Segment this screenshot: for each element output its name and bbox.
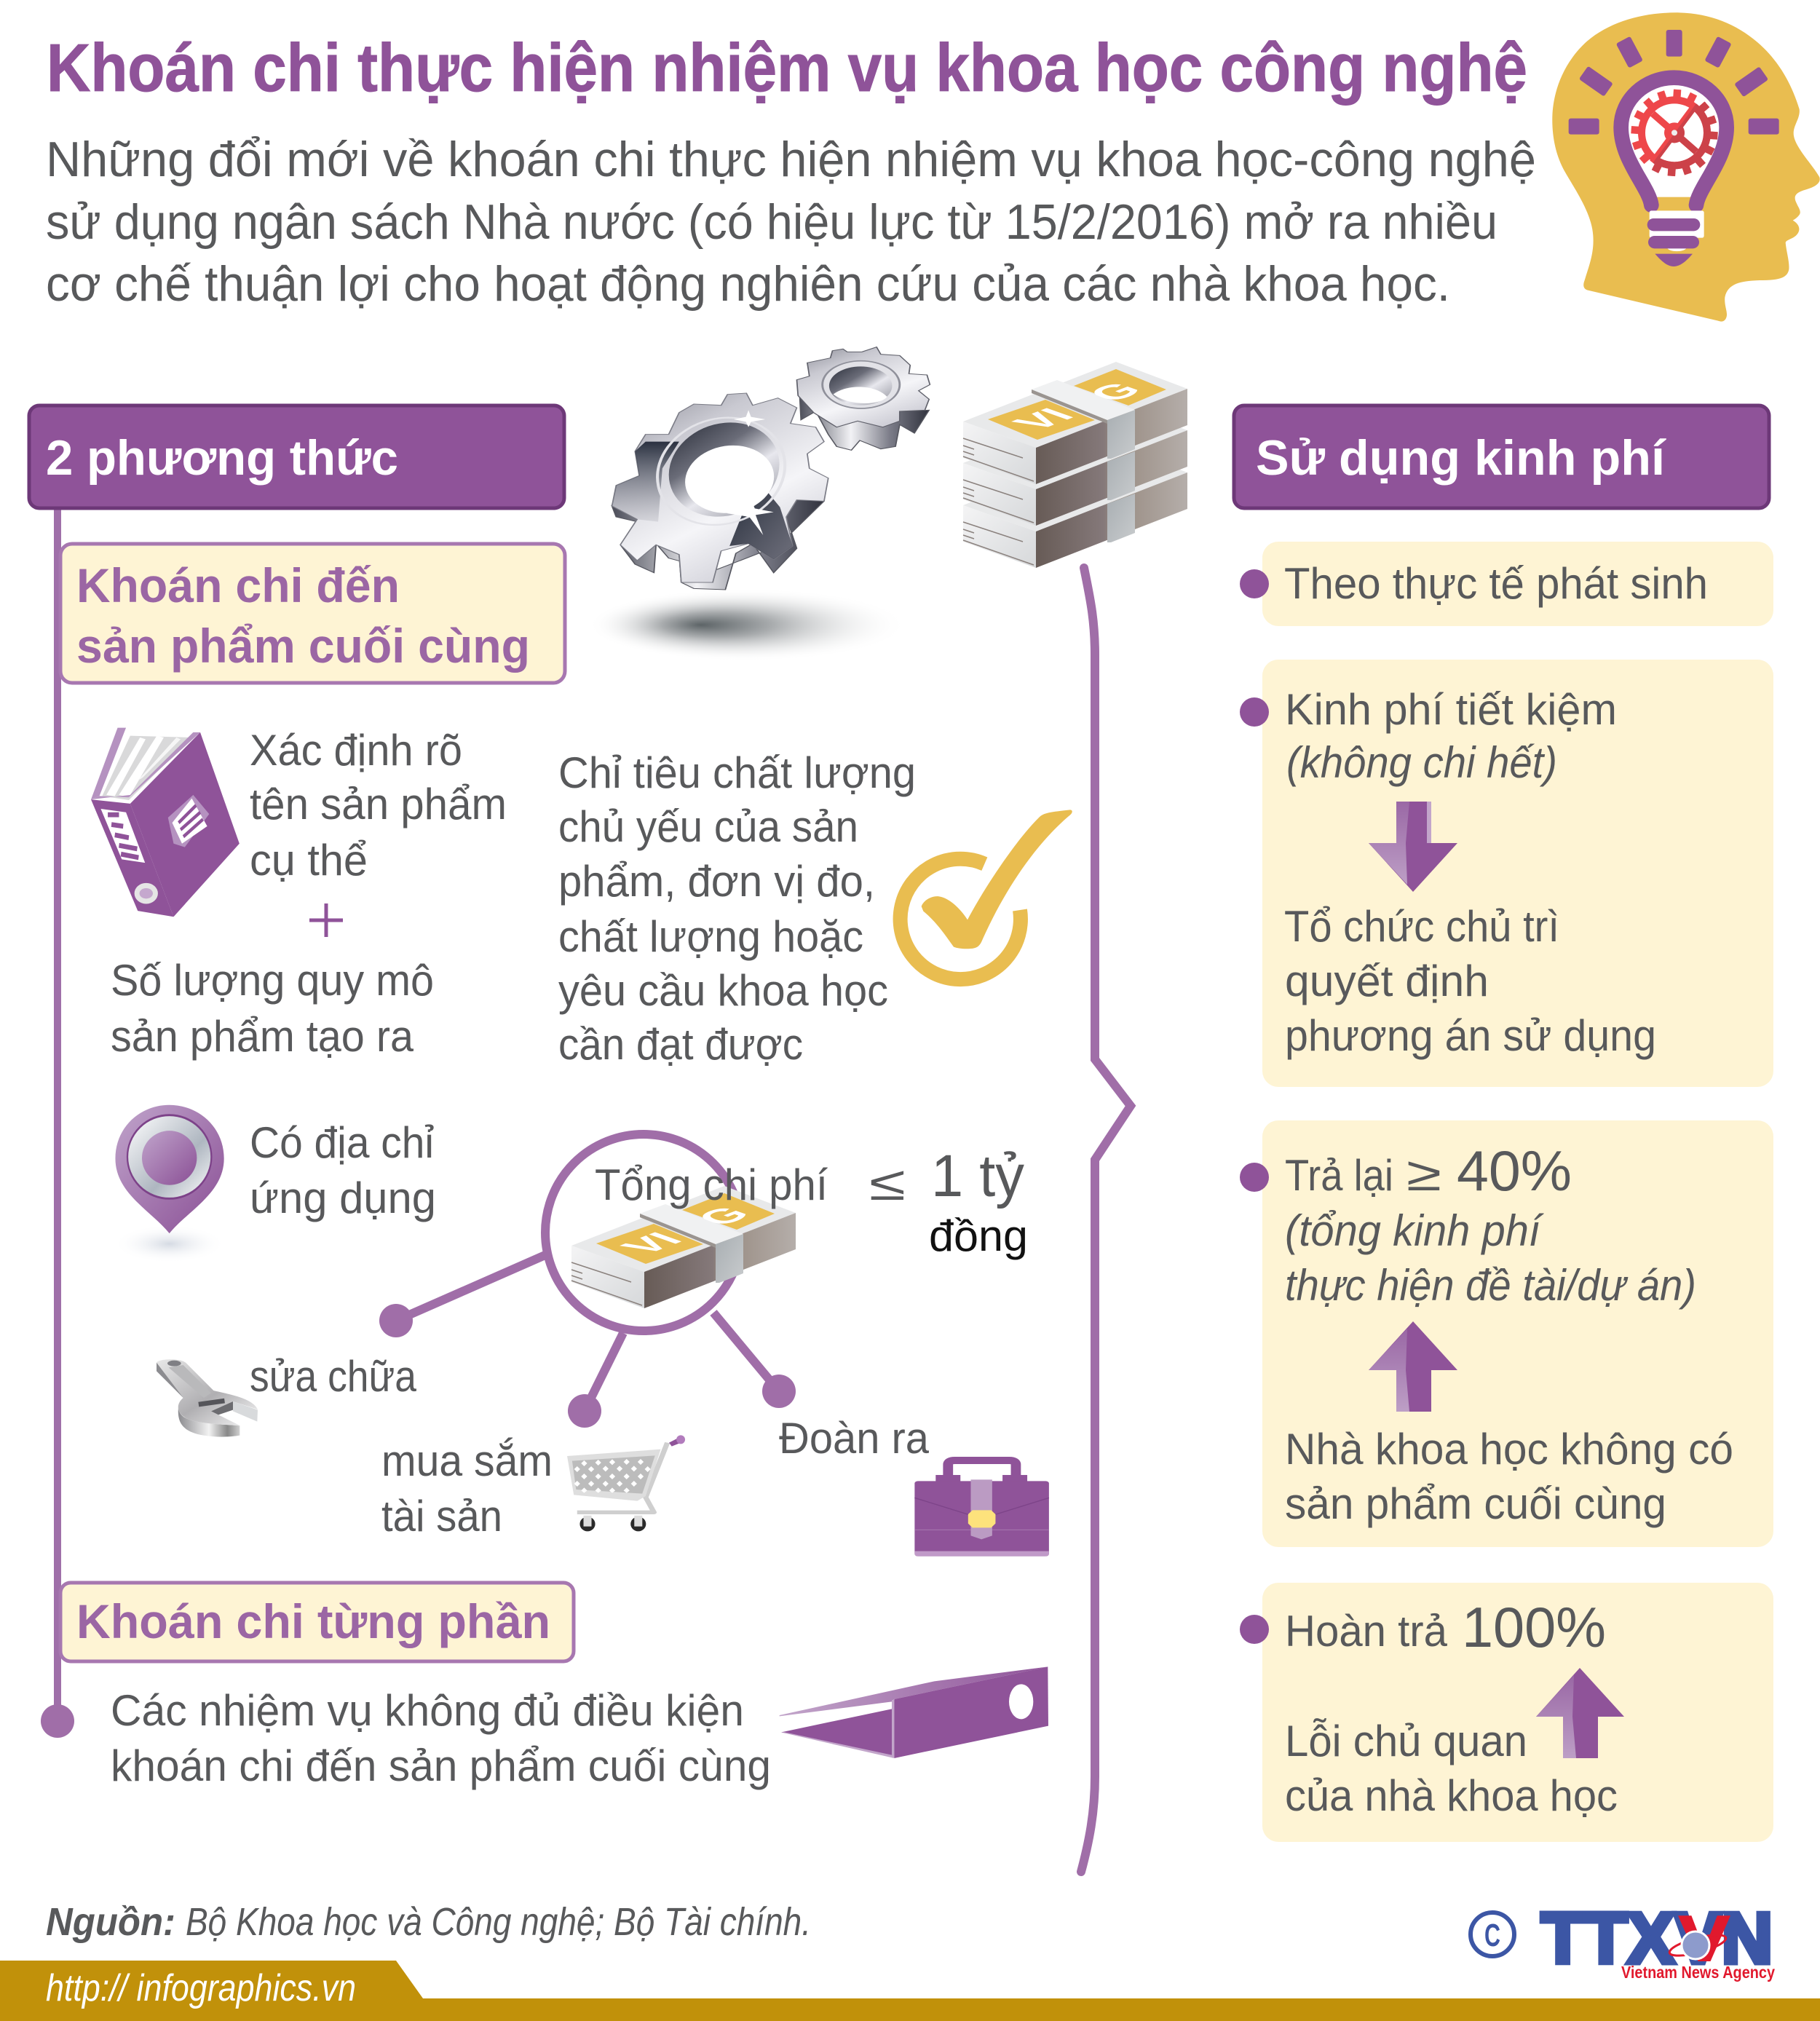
text: co dia chi ung dung: ứng dụng [250,1174,436,1222]
text: cac nhiem vu khong du dieu kien [111,1686,771,1790]
card: theo thuc te phat sinh [1240,542,1773,626]
text: chi tieu chat luong: phẩm, đơn vị đo, [558,857,875,906]
icon: purple binder [91,728,240,917]
card: kinh phi tiet kiem: phương án sử dụng [1285,1011,1656,1060]
card: tra lai 40%: Trả lại [1285,1151,1393,1200]
subheading box: khoan chi tung phan: Khoán chi từng phần [76,1594,550,1648]
text: mua sam tai san [381,1436,553,1541]
card: tra lai 40%: Nhà khoa học không có [1285,1425,1733,1474]
text: so luong quy mo san pham tao ra: Số lượng quy mô [111,956,434,1005]
arrow down [1369,802,1457,892]
text: co dia chi ung dung: Có địa chỉ [250,1118,434,1167]
icon: head with lightbulb and gear [1552,12,1820,322]
logo: TTXVN: V [1679,1902,1730,1974]
intro text [46,132,1536,312]
connector lines and dots [379,1254,796,1428]
vertical timeline with end dot [41,502,74,1738]
card: hoan tra 100%: Lỗi chủ quan [1285,1717,1527,1765]
arrow up [1536,1668,1624,1758]
icon: location pin [114,1105,226,1263]
logo: TTXVN: TTXVN [1541,1898,1773,1978]
header: 2 phuong thuc: 2 phương thức [46,430,398,486]
logo: TTXVN: C [1484,1918,1500,1953]
card: tra lai 40%: sản phẩm cuối cùng [1285,1479,1666,1528]
icon: briefcase [914,1460,1049,1557]
text: so luong quy mo san pham tao ra [111,956,434,1061]
card: kinh phi tiet kiem: Kinh phí tiết kiệm [1285,685,1617,734]
header: 2 phuong thuc [29,406,564,508]
subheading box: khoan chi den san pham cuoi cung: Khoán chi đến [76,558,400,612]
text: cac nhiem vu khong du dieu kien: Các nhiệm vụ không đủ điều kiện [111,1686,744,1735]
icon: gold check mark [901,810,1072,979]
text: chi tieu chat luong [558,748,916,1069]
subheading box: khoan chi den san pham cuoi cung: sản phẩm cuối cùng [76,619,530,673]
text: chi tieu chat luong: chủ yếu của sản [558,802,858,851]
text: mua sam tai san: mua sắm [381,1436,553,1485]
footer band with url [0,1961,1820,2021]
source: Bộ Khoa học và Công nghệ; Bộ Tài chính. [186,1900,811,1944]
text: so luong quy mo san pham tao ra: sản phẩm tạo ra [111,1012,414,1061]
icon: shopping cart [567,1435,685,1531]
icon: open folder [780,1666,1048,1758]
header: su dung kinh phi [1234,406,1769,508]
intro text: Những đổi mới về khoán chi thực hiện nhiệm vụ khoa học-công nghệ [46,132,1536,187]
subheading box: khoan chi tung phan [60,1583,574,1661]
text: sua chua: sửa chữa [250,1352,417,1401]
arrow up [1369,1321,1457,1412]
plus sign [309,903,343,937]
magnifier circle [545,1134,742,1331]
intro text: cơ chế thuận lợi cho hoạt động nghiên cứu của các nhà khoa học. [46,256,1450,312]
footer band with url: http:// infographics.vn [46,1967,356,2009]
header: su dung kinh phi: Sử dụng kinh phí [1256,430,1666,486]
text: less than or equal 1 ty dong: ≤ [869,1156,906,1210]
text: mua sam tai san: tài sản [381,1492,502,1541]
icon: wrench [157,1359,258,1437]
text: co dia chi ung dung [250,1118,436,1222]
text: xac dinh ro ten san pham cu the: tên sản phẩm [250,780,507,828]
text: xac dinh ro ten san pham cu the [250,726,507,885]
card: kinh phi tiet kiem: Tổ chức chủ trì [1284,902,1559,951]
card: kinh phi tiet kiem: (không chi hết) [1286,738,1557,787]
card: hoan tra 100%: Hoàn trả [1285,1607,1448,1656]
text: less than or equal 1 ty dong: đồng [929,1211,1028,1260]
source: Nguồn: [46,1900,175,1944]
intro text: sử dụng ngân sách Nhà nước (có hiệu lực từ 15/2/2016) mở ra nhiều [46,194,1497,250]
panel: 2 phuong thuc [29,406,1072,1790]
text: xac dinh ro ten san pham cu the: cụ thể [250,836,368,885]
card: tra lai 40%: 40% [1457,1139,1572,1203]
text: xac dinh ro ten san pham cu the: Xác định rõ [250,726,462,775]
text: chi tieu chat luong: cần đạt được [558,1020,803,1069]
card: tra lai 40%: (tổng kinh phí [1285,1206,1544,1255]
text: doan ra: Đoàn ra [779,1414,930,1463]
card: hoan tra 100%: của nhà khoa học [1285,1771,1618,1820]
text: chi tieu chat luong: chất lượng hoặc [558,912,863,961]
icon: single money bundle [571,1186,796,1308]
bracket connector [1081,568,1131,1872]
text: less than or equal 1 ty dong: 1 tỷ [931,1143,1024,1209]
subheading box: khoan chi den san pham cuoi cung [60,544,565,683]
card: tra lai 40%: ≥ [1406,1147,1441,1201]
text: chi tieu chat luong: Chỉ tiêu chất lượng [558,748,916,797]
logo: TTXVN: Vietnam News Agency [1621,1963,1775,1982]
card: hoan tra 100%: 100% [1462,1595,1606,1659]
card: hoan tra 100% [1240,1583,1773,1842]
text: less than or equal 1 ty dong [869,1143,1028,1260]
card: kinh phi tiet kiem [1240,660,1773,1087]
title: Khoán chi thực hiện nhiệm vụ khoa học công nghệ [47,30,1527,106]
card: tra lai 40% [1240,1120,1773,1547]
card: kinh phi tiet kiem: quyết định [1285,957,1489,1005]
text: chi tieu chat luong: yêu cầu khoa học [558,966,888,1015]
icon: stacked money bundles [963,362,1187,568]
icon: metal gears [589,347,930,661]
card: theo thuc te phat sinh: Theo thực tế phát sinh [1284,559,1708,608]
panel: su dung kinh phi [1234,406,1773,1842]
text: tong chi phi: Tổng chi phí [595,1160,828,1209]
text: cac nhiem vu khong du dieu kien: khoán chi đến sản phẩm cuối cùng [111,1741,771,1790]
card: tra lai 40%: thực hiện đề tài/dự án) [1285,1261,1696,1310]
